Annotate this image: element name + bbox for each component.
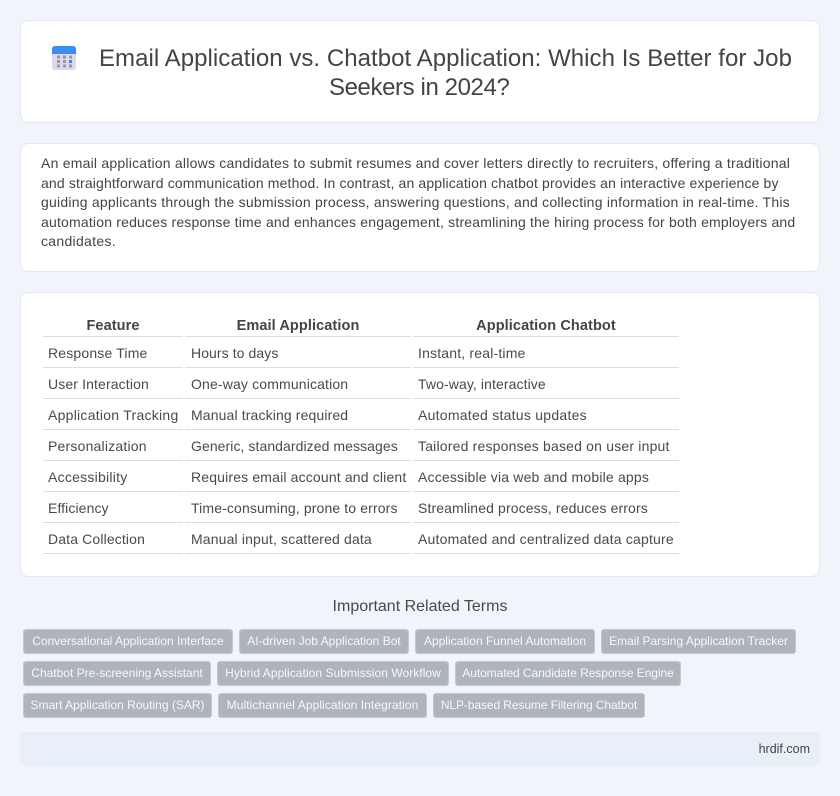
row: data collection [43,531,679,554]
row: data collection: Automated and centralized data capture [418,531,674,547]
tag [433,693,645,718]
tag: Automated Candidate Response Engine [462,666,674,680]
row: personalization [43,438,679,461]
tag: AI-driven Job Application Bot [247,634,401,648]
row: application tracking: Automated status updates [418,407,587,423]
tag: Smart Application Routing (SAR) [30,698,205,712]
text block: introduction paragraph: An email application allows candidates to submit resumes and cover letters directly to recruiters, offering a traditional [41,155,790,171]
row: efficiency [43,500,679,523]
table header [43,318,679,337]
panel: title [20,20,820,123]
row: response time: Instant, real-time [418,345,526,361]
row: user interaction: User Interaction [48,376,149,392]
tag [455,661,681,686]
row: personalization: Generic, standardized messages [191,438,398,454]
icon: calendar [52,46,76,70]
footer source text: hrdif.com [759,742,810,756]
row: user interaction [43,376,679,399]
row: accessibility [43,469,679,492]
text block: introduction paragraph [41,155,795,249]
table header: Application Chatbot [476,318,616,334]
heading: page title: Seekers in 2024? [329,74,509,101]
row: application tracking: Manual tracking required [191,407,348,423]
table header: Email Application [237,318,359,334]
tag: Application Funnel Automation [424,634,586,648]
row: accessibility: Requires email account and client [191,469,406,485]
row: user interaction: Two-way, interactive [418,376,546,392]
text block: introduction paragraph: candidates. [41,233,116,249]
tag: NLP-based Resume Filtering Chatbot [441,698,637,712]
row: data collection: Data Collection [48,531,145,547]
footer [20,732,820,766]
heading: page title [99,45,792,101]
heading: important related terms: Important Related Terms [333,598,507,615]
row: response time: Response Time [48,345,147,361]
row: efficiency: Efficiency [48,500,109,516]
tag: Multichannel Application Integration [227,698,418,712]
tag [218,693,427,718]
tag [239,629,409,654]
row: response time [43,345,679,368]
panel: comparison table [20,292,820,577]
tag [415,629,595,654]
row: data collection: Manual input, scattered data [191,531,372,547]
row: efficiency: Streamlined process, reduces errors [418,500,648,516]
text block: introduction paragraph: and straightforward communication method. In contrast, an application chatbot provides an interactive experience by [41,175,779,191]
text block: introduction paragraph: automation reduces response time and enhances engagement, streamlining the hiring process for both employers and [41,214,795,230]
tag: Conversational Application Interface [32,634,224,648]
text block: introduction paragraph: guiding applicants through the submission process, answering questions, and collecting information in real-time. This [41,194,790,210]
heading: page title: Email Application vs. Chatbot Application: Which Is Better for Job [99,45,792,72]
row: accessibility: Accessible via web and mobile apps [418,469,649,485]
table header: Feature [86,318,140,334]
row: personalization: Tailored responses based on user input [418,438,670,454]
tag: Chatbot Pre-screening Assistant [31,666,203,680]
tag: Email Parsing Application Tracker [609,634,788,648]
row: user interaction: One-way communication [191,376,348,392]
tag: Hybrid Application Submission Workflow [225,666,441,680]
panel: introduction [20,143,820,272]
row: accessibility: Accessibility [48,469,128,485]
tags: related terms [23,629,796,718]
row: efficiency: Time-consuming, prone to errors [191,500,398,516]
tag [23,693,212,718]
row: application tracking [43,407,679,430]
tag [23,661,211,686]
tag [601,629,796,654]
row: response time: Hours to days [191,345,278,361]
row: application tracking: Application Tracking [48,407,178,423]
tag [217,661,449,686]
tag [23,629,233,654]
row: personalization: Personalization [48,438,147,454]
